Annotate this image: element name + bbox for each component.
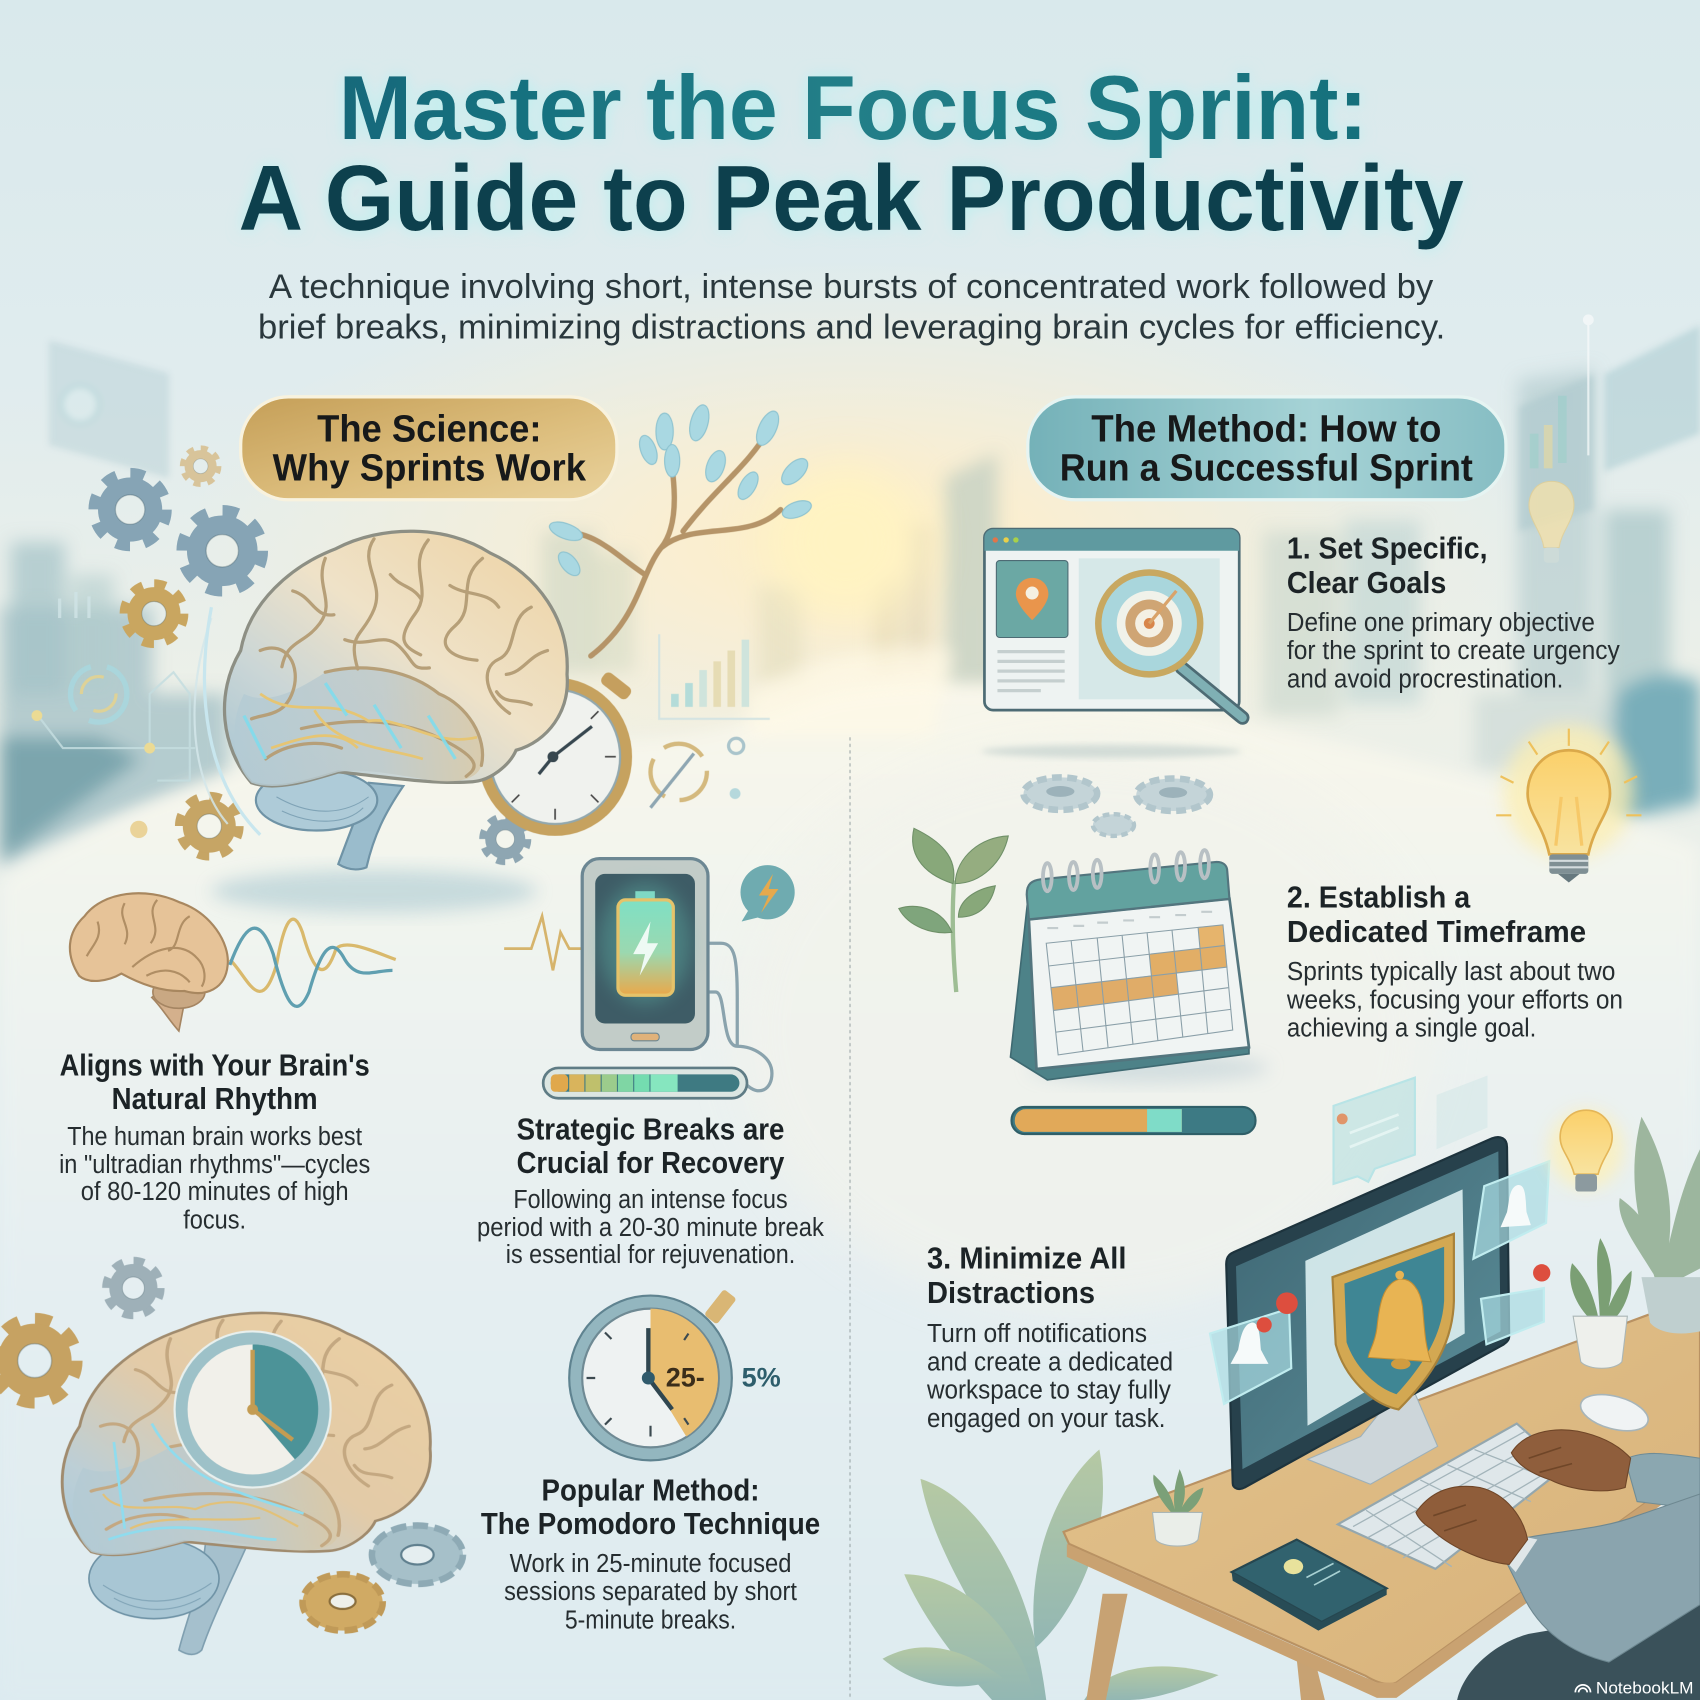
faded lightbulb (1529, 481, 1574, 563)
heading and text: pomodoro: The Pomodoro Technique (481, 1508, 820, 1541)
small desk plant (1152, 1469, 1203, 1546)
heading and text: strategic breaks: period with a 20-30 minute break (477, 1214, 824, 1242)
tree with leaves (547, 403, 814, 656)
progress bar: timeframe (1012, 1107, 1255, 1134)
text: step 3: workspace to stay fully (926, 1377, 1171, 1405)
heading and text: strategic breaks: is essential for rejuvenation. (506, 1241, 795, 1269)
icon: pomodoro stopwatch: 25- (666, 1362, 705, 1393)
icon: browser goal window (981, 529, 1242, 758)
subtitle: brief breaks, minimizing distractions and leveraging brain cycles for efficiency. (258, 308, 1445, 346)
faded UI panels: charts (1519, 314, 1700, 531)
heading pill: The Science (241, 397, 617, 500)
text: step 2: Sprints typically last about two (1287, 958, 1615, 986)
heading pill: The Method (1028, 397, 1506, 500)
keyboard (1338, 1424, 1566, 1569)
heading pill: The Method: The Method: How to (1091, 408, 1441, 450)
title: A Guide to Peak Productivity (239, 146, 1464, 250)
mouse (1577, 1388, 1652, 1437)
heading and text: natural rhythm: in "ultradian rhythms"—cycles (59, 1151, 370, 1179)
heading and text: strategic breaks: Following an intense focus (513, 1186, 788, 1214)
text: step 3: engaged on your task. (927, 1405, 1165, 1433)
heading and text: natural rhythm: Natural Rhythm (112, 1083, 318, 1116)
progress bar: recharge (543, 1068, 747, 1098)
heading and text: strategic breaks (477, 1113, 824, 1269)
main brain (204, 531, 567, 913)
text: step 2: weeks, focusing your efforts on (1286, 986, 1623, 1014)
heading and text: natural rhythm: The human brain works best (67, 1123, 362, 1151)
heading pill: The Science: The Science: (317, 408, 542, 450)
heading and text: natural rhythm: focus. (183, 1206, 246, 1234)
divider (849, 737, 851, 1700)
heading and text: strategic breaks: Strategic Breaks are (517, 1113, 784, 1146)
main stopwatch (478, 670, 633, 836)
text: step 2: achieving a single goal. (1287, 1014, 1536, 1042)
desk plant right (1570, 1238, 1632, 1328)
heading pill: The Science: Why Sprints Work (273, 447, 587, 489)
text: step 1 (1287, 532, 1620, 693)
desk legs (1086, 1594, 1325, 1700)
monitor stand (1308, 1393, 1438, 1484)
text: step 2: Dedicated Timeframe (1287, 916, 1586, 949)
tablet (1232, 1540, 1387, 1631)
text: step 3: 3. Minimize All (927, 1242, 1126, 1275)
NotebookLM watermark: NotebookLM (1596, 1679, 1693, 1697)
desk top (1064, 1296, 1700, 1684)
heading and text: strategic breaks: Crucial for Recovery (517, 1147, 785, 1180)
icon: lightbulb (1496, 724, 1641, 883)
faded UI panel: profile (50, 342, 168, 477)
bulb near monitor (1549, 1110, 1623, 1192)
text: step 1: for the sprint to create urgency (1287, 637, 1620, 665)
large leaves (883, 1450, 1219, 1700)
heading and text: pomodoro: Work in 25-minute focused (510, 1550, 791, 1578)
text: step 1: 1. Set Specific, (1287, 532, 1487, 565)
heading and text: pomodoro: sessions separated by short (504, 1578, 797, 1606)
title: Master the Focus Sprint: (339, 58, 1368, 159)
person arms and hands (1416, 1430, 1700, 1700)
flat gears (302, 1525, 463, 1631)
heading and text: pomodoro: 5-minute breaks. (565, 1606, 736, 1634)
brain waves (230, 919, 396, 1006)
icon: calendar (1010, 850, 1268, 1083)
notification cards (1210, 1076, 1550, 1404)
title (239, 58, 1464, 250)
magnifier (1098, 572, 1242, 718)
text: step 3: Turn off notifications (927, 1320, 1147, 1348)
heading and text: pomodoro (481, 1475, 820, 1634)
icon: pomodoro stopwatch: 5% (742, 1362, 781, 1393)
text: step 3: and create a dedicated (927, 1348, 1173, 1376)
icon: small brain with waves (70, 893, 396, 1031)
left hand (1416, 1486, 1528, 1564)
text: step 1: and avoid procrestination. (1287, 665, 1563, 693)
text: step 2 (1286, 881, 1623, 1042)
heading and text: natural rhythm: of 80-120 minutes of high (81, 1178, 349, 1206)
subtitle: A technique involving short, intense bursts of concentrated work followed by (269, 268, 1434, 306)
winding road (0, 683, 1700, 1700)
heading pill: The Method: Run a Successful Sprint (1060, 447, 1473, 489)
desk scene (1064, 1076, 1700, 1700)
icon: sprout (899, 828, 1008, 992)
flat gears: step 2 (1023, 777, 1210, 836)
mini bar chart (659, 634, 770, 719)
text: step 1: Clear Goals (1287, 567, 1446, 600)
subtitle (258, 268, 1445, 346)
text: step 2: 2. Establish a (1287, 881, 1471, 914)
right back plant (1619, 1117, 1700, 1290)
gears group: science (95, 448, 527, 861)
right hand (1511, 1430, 1631, 1491)
icon: phone with battery (504, 859, 795, 1091)
text: step 1: Define one primary objective (1287, 609, 1595, 637)
heading and text: natural rhythm (59, 1050, 370, 1234)
heading and text: pomodoro: Popular Method: (542, 1475, 759, 1508)
monitor (1226, 1137, 1509, 1489)
text: step 3 (926, 1242, 1173, 1433)
shield (1332, 1234, 1454, 1409)
lower brain with clock (0, 1261, 463, 1654)
small airplane target icon (651, 738, 744, 808)
icon: pomodoro stopwatch (569, 1289, 781, 1460)
heading and text: natural rhythm: Aligns with Your Brain's (60, 1050, 370, 1083)
futuristic circuit lines (31, 592, 228, 838)
text: step 3: Distractions (927, 1277, 1095, 1310)
